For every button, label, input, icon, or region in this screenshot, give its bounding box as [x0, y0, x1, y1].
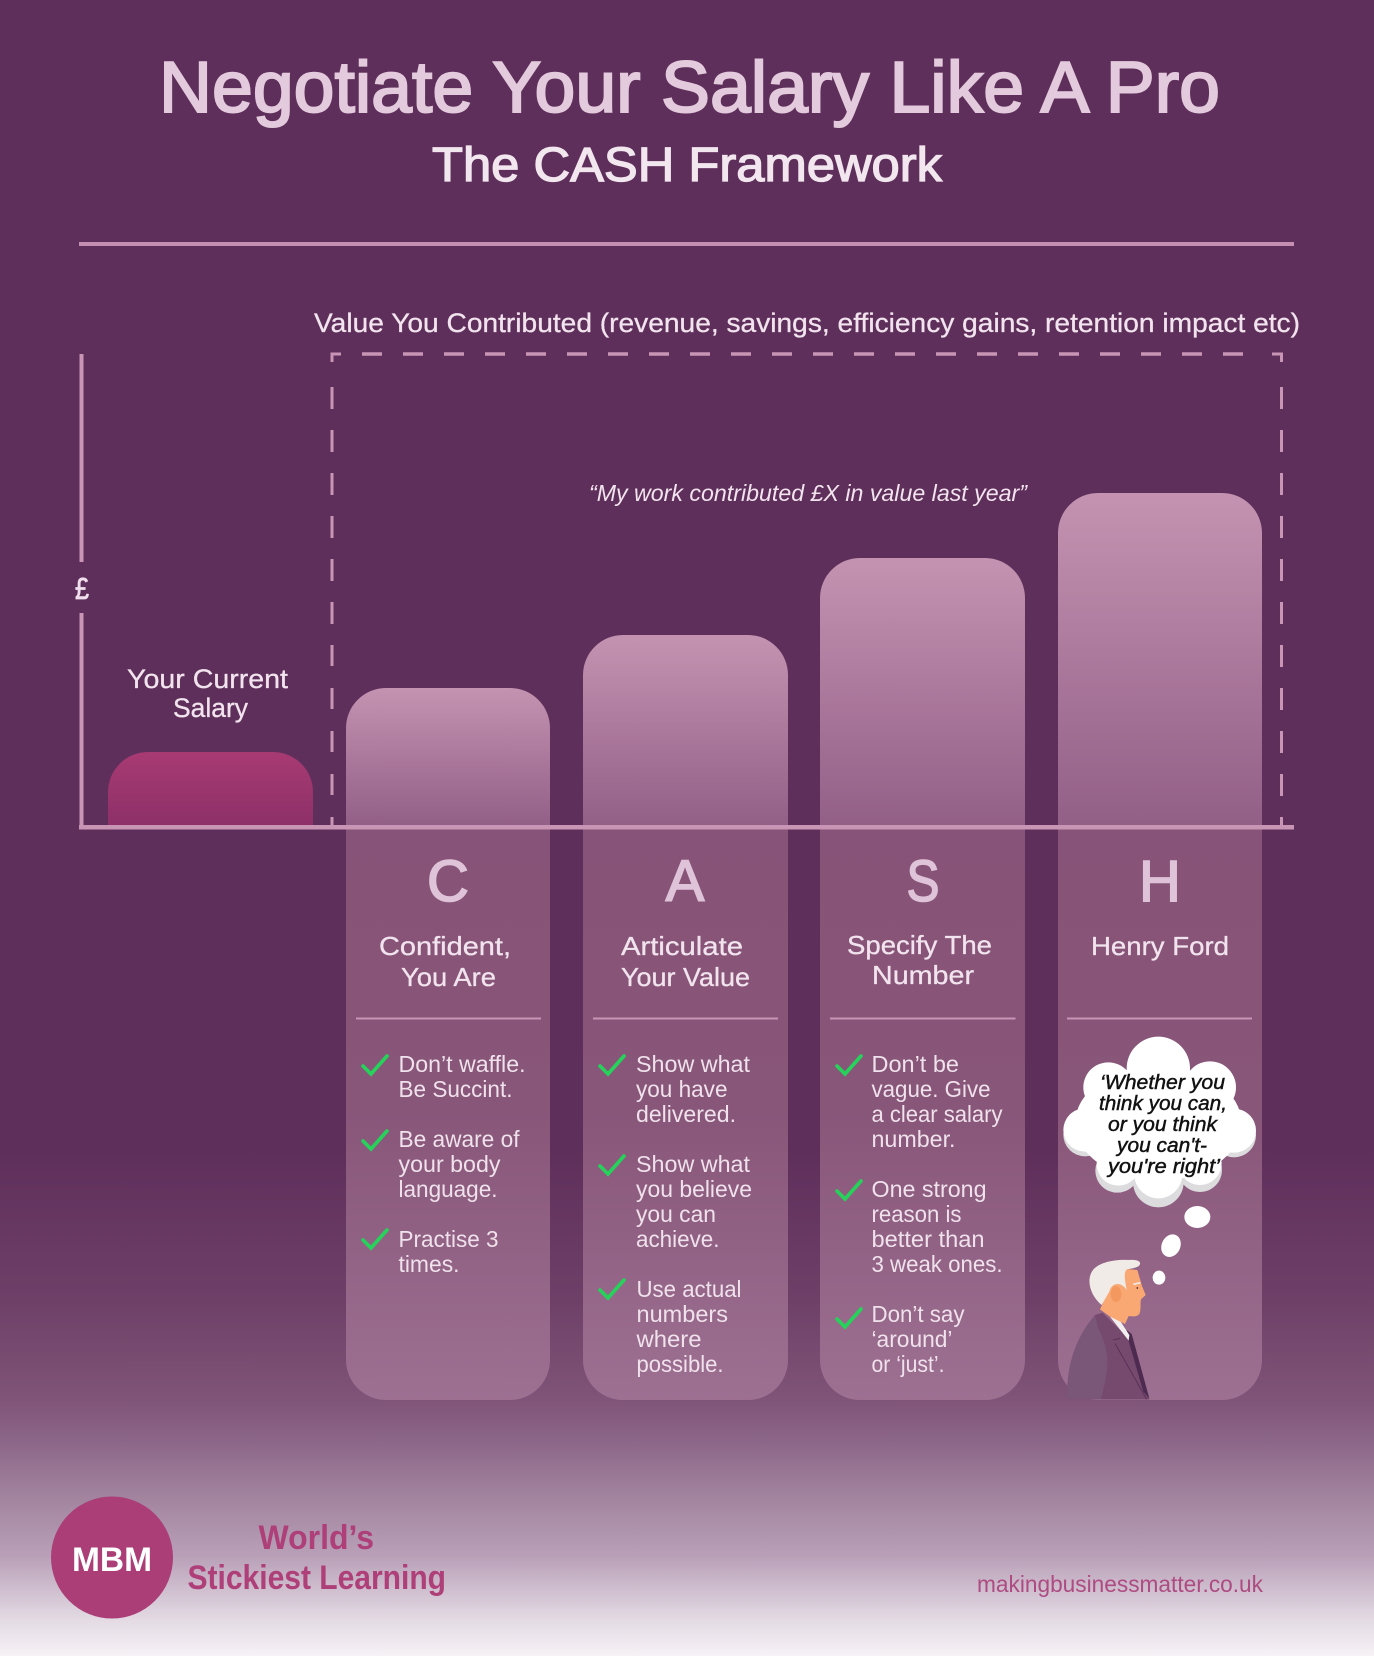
- website: makingbusinessmatter.co.uk: [977, 1571, 1263, 1597]
- y axis: [80, 354, 84, 827]
- bar A: [583, 635, 788, 826]
- column S: [820, 558, 1025, 1400]
- list S: [872, 1051, 1003, 1377]
- current salary label: [127, 664, 289, 723]
- list S: vague. Give: [872, 1076, 990, 1102]
- heading C: Confident,: [379, 931, 511, 961]
- list C: Be Succint.: [398, 1076, 512, 1102]
- current salary label: Salary: [173, 693, 248, 723]
- list A: [635, 1051, 752, 1377]
- title: Negotiate Your Salary Like A Pro: [159, 48, 1220, 128]
- heading S: Specify The: [847, 930, 992, 960]
- checks C: [363, 1056, 387, 1248]
- tagline: Stickiest Learning: [188, 1559, 446, 1597]
- heading A: Your Value: [621, 962, 750, 992]
- axis currency label: £: [75, 571, 89, 606]
- panel C body: [346, 828, 550, 1400]
- checks S: [837, 1056, 861, 1327]
- subtitle: The CASH Framework: [432, 139, 943, 192]
- list S: Don’t say: [872, 1301, 965, 1327]
- panel S body: [820, 828, 1025, 1400]
- list A: you can: [636, 1201, 716, 1227]
- thought quote: ‘Whether you: [1100, 1072, 1225, 1094]
- list A: delivered.: [636, 1101, 736, 1127]
- list A: Show what: [636, 1151, 751, 1177]
- list S: a clear salary: [872, 1101, 1003, 1127]
- dashed value region: [332, 354, 1282, 825]
- list S: better than: [872, 1226, 984, 1252]
- heading S: [847, 930, 992, 990]
- heading A: Articulate: [621, 931, 743, 961]
- letter C: C: [427, 849, 469, 914]
- list A: where: [635, 1326, 702, 1352]
- list A: Show what: [636, 1051, 751, 1077]
- current salary bar: [108, 752, 313, 827]
- thought quote: [1099, 1072, 1227, 1178]
- tagline: [188, 1519, 446, 1597]
- letter A: A: [666, 849, 705, 914]
- heading C: [379, 931, 511, 992]
- list A: achieve.: [636, 1226, 720, 1252]
- icon: Henry Ford figure: [1067, 1260, 1149, 1399]
- thought quote: or you think: [1108, 1114, 1218, 1136]
- list A: Use actual: [636, 1276, 742, 1302]
- list S: or ‘just’.: [872, 1351, 944, 1377]
- list S: ‘around’: [872, 1326, 952, 1352]
- checks A: [600, 1056, 624, 1298]
- logo: MBM: MBM: [72, 1541, 152, 1579]
- column C: [346, 688, 550, 1400]
- thought quote: you're right’: [1106, 1156, 1221, 1178]
- thought quote: you can't-: [1115, 1135, 1207, 1157]
- list A: you believe: [636, 1176, 752, 1202]
- heading C: You Are: [401, 962, 496, 992]
- current salary label: Your Current: [127, 664, 289, 694]
- quote: “My work contributed £X in value last year”: [589, 480, 1028, 506]
- list C: Don’t waffle.: [398, 1051, 526, 1077]
- thought bubble: [1063, 1037, 1256, 1285]
- bar S: [820, 558, 1025, 826]
- panel H body: [1058, 828, 1262, 1400]
- list C: language.: [398, 1176, 498, 1202]
- list S: 3 weak ones.: [872, 1251, 1002, 1277]
- value label: Value You Contributed (revenue, savings, efficiency gains, retention impact etc): [314, 308, 1300, 338]
- list S: One strong: [872, 1176, 986, 1202]
- column A: [583, 635, 788, 1400]
- heading S: Number: [872, 960, 974, 990]
- letter H: H: [1139, 849, 1181, 914]
- list A: you have: [636, 1076, 728, 1102]
- list A: possible.: [636, 1351, 724, 1377]
- list S: number.: [872, 1126, 956, 1152]
- list C: Practise 3: [398, 1226, 498, 1252]
- heading H: Henry Ford: [1091, 931, 1229, 961]
- bar C: [346, 688, 550, 826]
- heading A: [621, 931, 750, 992]
- column H: [1058, 493, 1262, 1400]
- list S: Don’t be: [872, 1051, 959, 1077]
- bar H: [1058, 493, 1262, 826]
- list C: Be aware of: [398, 1126, 520, 1152]
- list C: [398, 1051, 526, 1277]
- list C: times.: [398, 1251, 460, 1277]
- list A: numbers: [636, 1301, 728, 1327]
- panel A body: [583, 828, 788, 1400]
- list S: reason is: [872, 1201, 962, 1227]
- thought quote: think you can,: [1099, 1093, 1227, 1115]
- list C: your body: [398, 1151, 501, 1177]
- logo: MBM: [51, 1496, 173, 1618]
- letter S: S: [906, 849, 940, 914]
- tagline: World’s: [258, 1519, 374, 1557]
